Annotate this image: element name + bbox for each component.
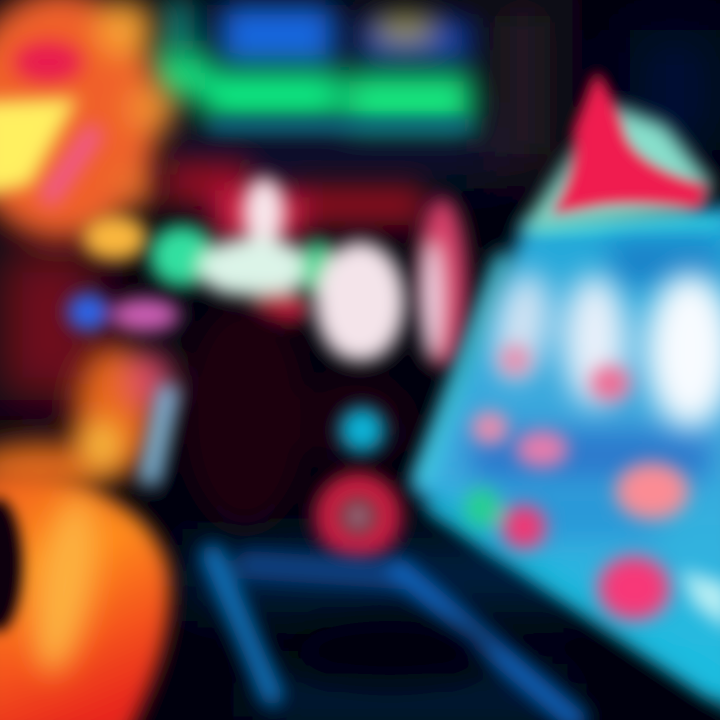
red ring [328, 486, 388, 546]
white and green cluster [150, 178, 466, 366]
bottom edge glow [430, 500, 720, 690]
pale strip [680, 570, 720, 630]
left edge glow [420, 255, 505, 485]
orange flame, bottom left [0, 478, 169, 720]
red triangle peak [520, 72, 712, 232]
dark blue centre [470, 240, 720, 540]
red stripe behind figures [165, 160, 425, 240]
pink accents in peaks [499, 344, 630, 401]
sun shape, top left [0, 0, 176, 260]
pink buttons [464, 412, 688, 620]
blue and pink capsule [68, 294, 179, 331]
floor blue lines [212, 555, 575, 720]
orange glow [0, 0, 176, 240]
bright core [22, 492, 108, 678]
blue upper band [165, 0, 470, 65]
pale mint outline [520, 105, 712, 232]
green lower band [150, 50, 473, 128]
pink inner [14, 42, 82, 82]
dark silhouette [185, 305, 410, 525]
pale peaks [487, 267, 720, 428]
dark floor centre [295, 624, 485, 680]
pink streak [50, 135, 92, 195]
teal glow under band [210, 118, 470, 132]
tablet panel [412, 205, 720, 715]
top edge glow [530, 222, 720, 232]
yellow wedge [0, 98, 78, 195]
cyan dot [340, 408, 384, 452]
dark notch [0, 497, 24, 633]
left glowing column [0, 345, 172, 494]
red triangle [552, 72, 706, 214]
tablet body [412, 205, 720, 715]
top screen: green and blue bands [150, 0, 473, 132]
yellow lamp [83, 216, 147, 260]
